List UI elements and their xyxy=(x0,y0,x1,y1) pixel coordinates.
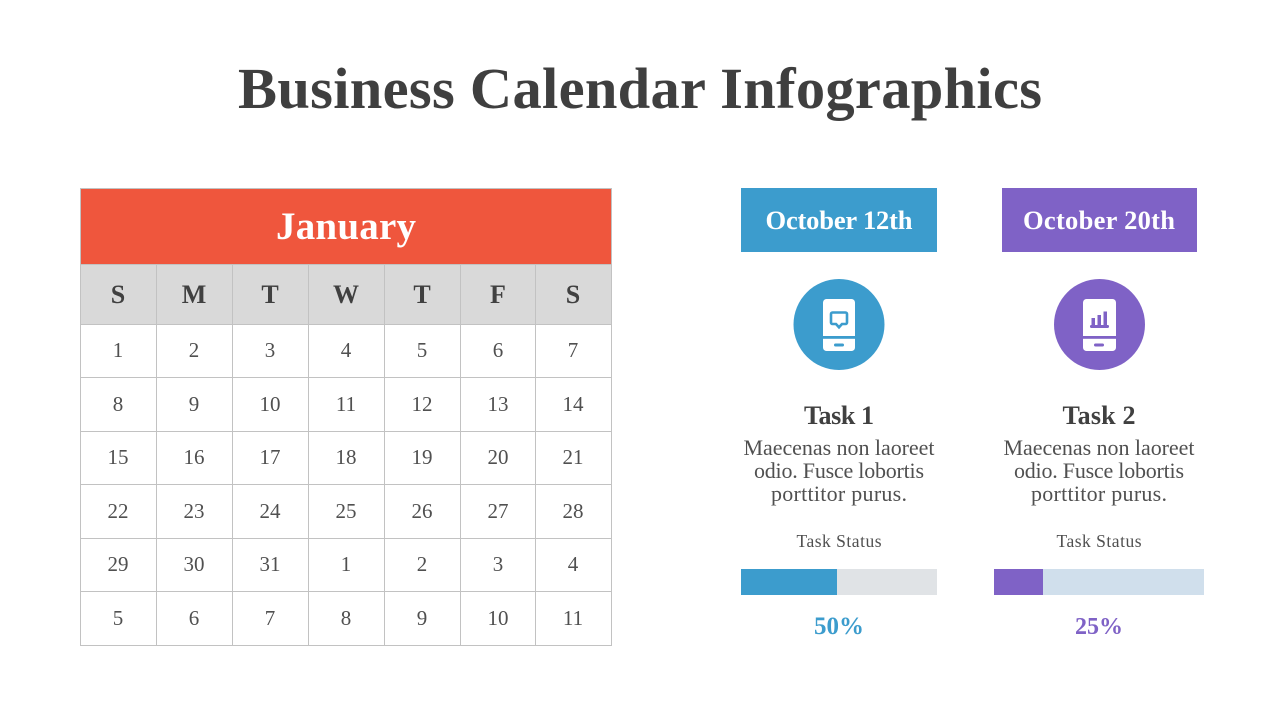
calendar dates: 22 xyxy=(108,499,128,523)
calendar dates: 18 xyxy=(336,445,356,469)
calendar dates: 19 xyxy=(412,445,432,469)
calendar dates: 4 xyxy=(568,552,579,576)
progress bar: 50% xyxy=(741,569,937,595)
date badge: October 12th: October 12th xyxy=(766,205,913,235)
task 1 percentage: 50% xyxy=(814,613,864,640)
task 1 status label: Task Status xyxy=(796,531,882,551)
calendar dates: 13 xyxy=(488,392,508,416)
task 2 description: Maecenas non laoreet xyxy=(1004,435,1194,460)
calendar dates: 17 xyxy=(260,445,280,469)
calendar dates: 28 xyxy=(562,499,584,523)
calendar dates: 3 xyxy=(493,552,503,576)
calendar dates: 12 xyxy=(412,392,432,416)
calendar dates: 1 xyxy=(113,338,123,362)
calendar dates: 2 xyxy=(417,552,427,576)
calendar dates: 10 xyxy=(488,606,508,630)
task 2 percentage: 25% xyxy=(1075,614,1123,640)
date badge: October 20th xyxy=(1002,188,1197,252)
calendar dates: 7 xyxy=(568,338,578,362)
calendar month header: January xyxy=(276,205,416,248)
calendar dates: 8 xyxy=(341,606,351,630)
calendar dates: 10 xyxy=(260,392,280,416)
task 1 description: Maecenas non laoreet xyxy=(744,435,934,460)
calendar dates: 7 xyxy=(265,606,275,630)
calendar dates: 23 xyxy=(184,499,204,523)
calendar dates: 11 xyxy=(563,606,583,630)
calendar dates: 14 xyxy=(562,392,584,416)
title: Business Calendar Infographics xyxy=(238,56,1042,121)
calendar dates: 21 xyxy=(562,445,584,469)
icon: phone with chat bubble xyxy=(794,279,884,370)
date badge: October 20th: October 20th xyxy=(1023,205,1175,235)
weekday header row: T xyxy=(261,280,279,309)
panel: task 1 xyxy=(741,188,937,640)
calendar dates: 6 xyxy=(189,606,199,630)
calendar dates: 5 xyxy=(417,338,427,362)
task 2 status label: Task Status xyxy=(1056,531,1142,551)
calendar dates: 9 xyxy=(417,606,427,630)
calendar dates: 25 xyxy=(336,499,356,523)
date badge: October 12th xyxy=(741,188,937,252)
panel: task 2 xyxy=(994,188,1204,640)
task 1 description: porttitor purus. xyxy=(771,481,907,506)
task 1 heading: Task 1 xyxy=(804,401,874,430)
task 2 heading: Task 2 xyxy=(1062,401,1136,430)
calendar dates: 16 xyxy=(184,445,204,469)
task 2 description xyxy=(1004,435,1194,506)
calendar dates: 1 xyxy=(341,552,351,576)
calendar dates: 8 xyxy=(113,392,123,416)
calendar month header xyxy=(80,188,612,264)
calendar dates: 29 xyxy=(108,552,128,576)
calendar dates xyxy=(108,338,584,630)
calendar dates: 27 xyxy=(488,499,508,523)
task 2 description: odio. Fusce lobortis xyxy=(1014,458,1184,483)
weekday header row: F xyxy=(490,280,506,309)
calendar dates: 2 xyxy=(189,338,199,362)
calendar dates: 9 xyxy=(189,392,199,416)
weekday header row: W xyxy=(333,280,359,309)
calendar dates: 24 xyxy=(260,499,281,523)
weekday header row: M xyxy=(182,280,206,309)
calendar dates: 30 xyxy=(184,552,204,576)
calendar dates: 4 xyxy=(341,338,352,362)
calendar dates: 15 xyxy=(108,445,128,469)
weekday header row: S xyxy=(566,280,580,309)
task 1 description: odio. Fusce lobortis xyxy=(754,458,924,483)
calendar dates: 20 xyxy=(488,445,508,469)
calendar dates: 26 xyxy=(412,499,432,523)
progress bar: 25% xyxy=(994,569,1204,595)
icon: phone with bar chart xyxy=(1054,279,1145,370)
weekday header row: S xyxy=(111,280,125,309)
calendar dates: 5 xyxy=(113,606,123,630)
task 2 description: porttitor purus. xyxy=(1031,481,1167,506)
weekday header row: T xyxy=(413,280,431,309)
panel: calendar xyxy=(80,188,612,646)
calendar dates: 6 xyxy=(493,338,503,362)
calendar dates: 3 xyxy=(265,338,275,362)
calendar dates: 31 xyxy=(260,552,280,576)
weekday header row xyxy=(80,264,612,324)
calendar dates: 11 xyxy=(336,392,356,416)
task 1 description xyxy=(744,435,934,506)
